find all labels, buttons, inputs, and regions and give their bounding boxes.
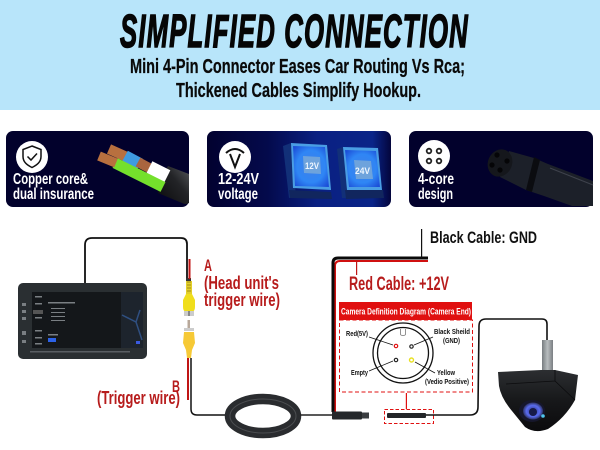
panel text bbox=[418, 171, 454, 203]
red line B bbox=[187, 358, 189, 400]
label A: (Head unit's bbox=[204, 273, 279, 293]
panel text: voltage bbox=[218, 186, 258, 203]
chip: 12V: 12V bbox=[305, 161, 320, 172]
pin labels: Black Sheild bbox=[434, 329, 470, 336]
RCA male connector bbox=[183, 320, 195, 358]
icon: voltage gauge bbox=[219, 141, 251, 173]
screen bbox=[22, 292, 143, 352]
camera definition diagram bbox=[339, 302, 472, 392]
black cable leader bbox=[421, 229, 422, 258]
pin labels: Red(5V) bbox=[346, 331, 368, 338]
subtitle bbox=[130, 56, 465, 102]
subtitle: Mini 4-Pin Connector Eases Car Routing Vs Rca; bbox=[130, 56, 465, 78]
cable to connector bbox=[300, 414, 333, 416]
icon: four pins bbox=[418, 140, 450, 172]
subtitle: Thickened Cables Simplify Hookup. bbox=[176, 80, 421, 102]
chip: 24V: 24V bbox=[355, 166, 371, 177]
connector face bbox=[369, 323, 435, 383]
lens bbox=[519, 400, 545, 422]
RCA female connector bbox=[183, 278, 195, 316]
red line A bbox=[188, 259, 190, 279]
vehicle side connector bbox=[332, 412, 369, 420]
label B bbox=[97, 377, 180, 408]
label A: A bbox=[204, 256, 212, 275]
chip: 24V bbox=[337, 147, 384, 199]
coiled cable bbox=[230, 399, 296, 433]
panel text: dual insurance bbox=[13, 186, 94, 203]
black cable label: Black Cable: GND bbox=[430, 228, 537, 247]
label B: B bbox=[172, 377, 180, 396]
panel text: 4-core bbox=[418, 171, 454, 188]
title: SIMPLIFIED CONNECTION bbox=[120, 5, 469, 57]
pin labels: (GND) bbox=[443, 338, 460, 345]
panel text: 12-24V bbox=[218, 171, 259, 188]
pin labels bbox=[346, 329, 470, 386]
camera cable bbox=[426, 319, 547, 415]
pin labels: Empty bbox=[351, 370, 368, 377]
label A: trigger wire) bbox=[204, 290, 280, 310]
red cable leader bbox=[356, 260, 357, 275]
panel: voltage bbox=[207, 131, 391, 207]
panel text bbox=[218, 171, 259, 203]
pin labels: (Vedio Positive) bbox=[425, 379, 469, 386]
panel text: Copper core& bbox=[13, 171, 88, 188]
threaded post bbox=[542, 340, 553, 371]
diagram heading: Camera Definition Diagram (Camera End) bbox=[341, 306, 471, 316]
chip: 12V bbox=[283, 143, 332, 199]
label A bbox=[204, 256, 280, 310]
header banner bbox=[0, 0, 600, 110]
icon: shield bbox=[16, 141, 48, 173]
leader to connector bbox=[406, 393, 407, 409]
power cables bbox=[333, 258, 428, 412]
camera body bbox=[498, 370, 578, 431]
panel text: design bbox=[418, 186, 453, 203]
panel: 4-core design bbox=[409, 131, 593, 207]
red cable label: Red Cable: +12V bbox=[349, 274, 449, 295]
connector illustration bbox=[483, 145, 593, 206]
panel text bbox=[13, 171, 94, 203]
label B: (Trigger wire) bbox=[97, 388, 180, 408]
cable illustration bbox=[99, 149, 189, 204]
head unit cable bbox=[85, 238, 187, 283]
rear view camera bbox=[498, 340, 578, 431]
trigger cable bbox=[191, 358, 226, 415]
head unit monitor bbox=[18, 283, 147, 359]
pin labels: Yellow bbox=[437, 370, 455, 377]
panel: copper core bbox=[6, 131, 189, 207]
camera end connector bbox=[384, 410, 434, 424]
